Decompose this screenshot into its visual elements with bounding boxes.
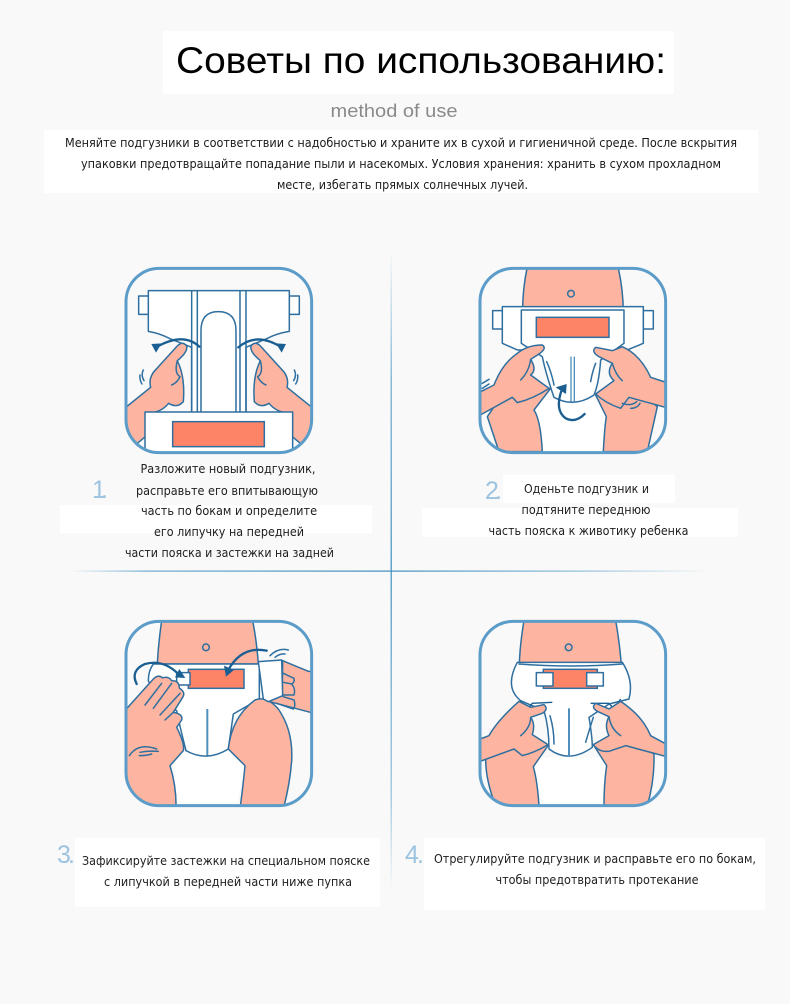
step 4 text: чтобы предотвратить протекание (496, 873, 698, 887)
right hand (594, 347, 669, 408)
right leg (228, 699, 292, 809)
title: Советы по использованию: (176, 40, 666, 81)
icon: step 2 pull up front (477, 267, 669, 453)
front panel (521, 310, 624, 402)
subtitle: method of use (330, 101, 458, 121)
step 2 text: Оденьте подгузник и (524, 482, 649, 496)
diaper front (511, 662, 630, 757)
left leg and hand (123, 676, 184, 809)
icon: step 3 fasten tabs (123, 621, 317, 809)
diaper sheet (139, 291, 299, 417)
step 1 text: часть по бокам и определите (141, 504, 317, 518)
step 3 text (57, 838, 380, 907)
right hand (251, 343, 314, 447)
step 1 text: его липучку на передней (154, 525, 304, 539)
belly (157, 621, 258, 664)
orange strip and left tab (177, 669, 244, 688)
step 3 text: с липучкой в передней части ниже пупка (104, 875, 352, 889)
left hand (477, 345, 549, 417)
intro text block: Меняйте подгузники в соответствии с надобностью и храните их в сухой и гигиеничной среде. После вскрытия (65, 136, 737, 150)
title (163, 31, 674, 94)
step 2 text (422, 475, 738, 538)
step 4 text (405, 838, 765, 910)
step 1 text: части пояска и застежки на задней (125, 546, 334, 560)
intro text block: упаковки предотвращайте попадание пыли и насекомых. Условия хранения: хранить в сухом прохладном (81, 157, 721, 171)
right tab held by hand (258, 648, 310, 713)
cross divider (70, 250, 710, 890)
number 4: 4. (405, 841, 424, 869)
number 2: 2. (485, 477, 502, 505)
step 4 text: Отрегулируйте подгузник и расправьте его по бокам, (434, 852, 756, 866)
arrows to strip (135, 650, 267, 684)
legs and lower sheet (487, 387, 657, 452)
waistband with orange strip (144, 411, 294, 448)
step 2 text: подтяните переднюю (522, 503, 650, 517)
diaper body (148, 663, 260, 757)
belly (522, 270, 624, 306)
left hand (123, 343, 187, 447)
number 3: 3. (57, 841, 75, 869)
step 3 text: Зафиксируйте застежки на специальном пояске (82, 854, 370, 868)
number 1: 1. (92, 476, 108, 504)
right hand (593, 701, 669, 757)
diaper back wings (493, 307, 653, 350)
intro text block: месте, избегать прямых солнечных лучей. (277, 178, 528, 192)
step 1 text: Разложите новый подгузник, (140, 462, 316, 476)
step 2 text: часть пояска к животику ребенка (488, 524, 688, 538)
belly (519, 621, 621, 664)
step 1 text (60, 462, 372, 560)
arrow: up curl (556, 384, 585, 420)
arrows: fold sides outward (151, 339, 286, 353)
icon: step 1 unfold diaper (123, 268, 314, 460)
legs (486, 741, 654, 806)
icon: step 4 adjust sides (477, 621, 669, 806)
left hand (477, 701, 548, 762)
step 1 text: расправьте его впитывающую (136, 484, 318, 498)
intro text block (44, 130, 758, 193)
